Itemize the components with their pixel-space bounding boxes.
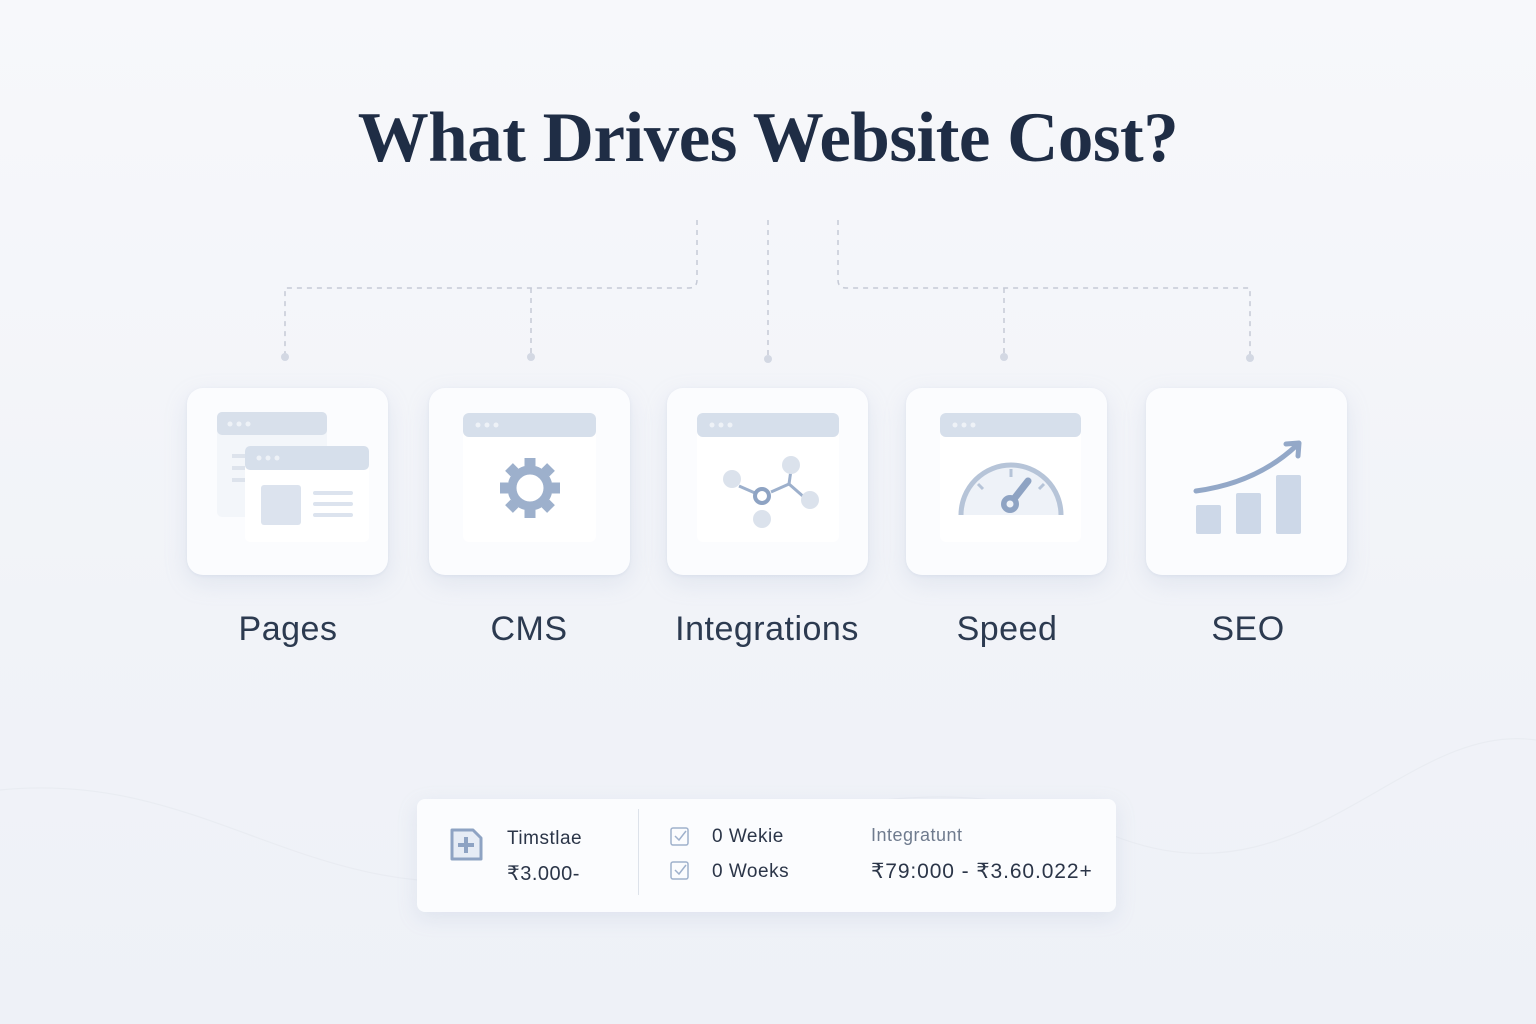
card: Integrations [667, 388, 868, 575]
title: What Drives Website Cost? [358, 99, 1178, 177]
label: SEO: SEO [1211, 610, 1285, 648]
text: base price: ₹3.000- [507, 863, 580, 885]
divider [638, 809, 639, 895]
card: SEO [1146, 388, 1347, 575]
label: Pages: Pages [239, 610, 337, 648]
checklist: 0 Wekie [712, 826, 784, 847]
label: Speed: Speed [957, 610, 1057, 648]
text: integration range: Integratunt [871, 825, 963, 845]
card: Speed [906, 388, 1107, 575]
label: CMS: CMS [490, 610, 568, 648]
text: price range: ₹79:000 - ₹3.60.022+ [871, 860, 1093, 883]
icon: document plus [450, 828, 482, 860]
text: timeline: Timstlae [507, 828, 582, 849]
card: Pages [187, 388, 388, 575]
checklist [670, 826, 789, 882]
checklist: 0 Woeks [712, 861, 789, 882]
bottom summary panel [417, 799, 1116, 912]
card: CMS [429, 388, 630, 575]
label: Integrations: Integrations [675, 610, 859, 648]
